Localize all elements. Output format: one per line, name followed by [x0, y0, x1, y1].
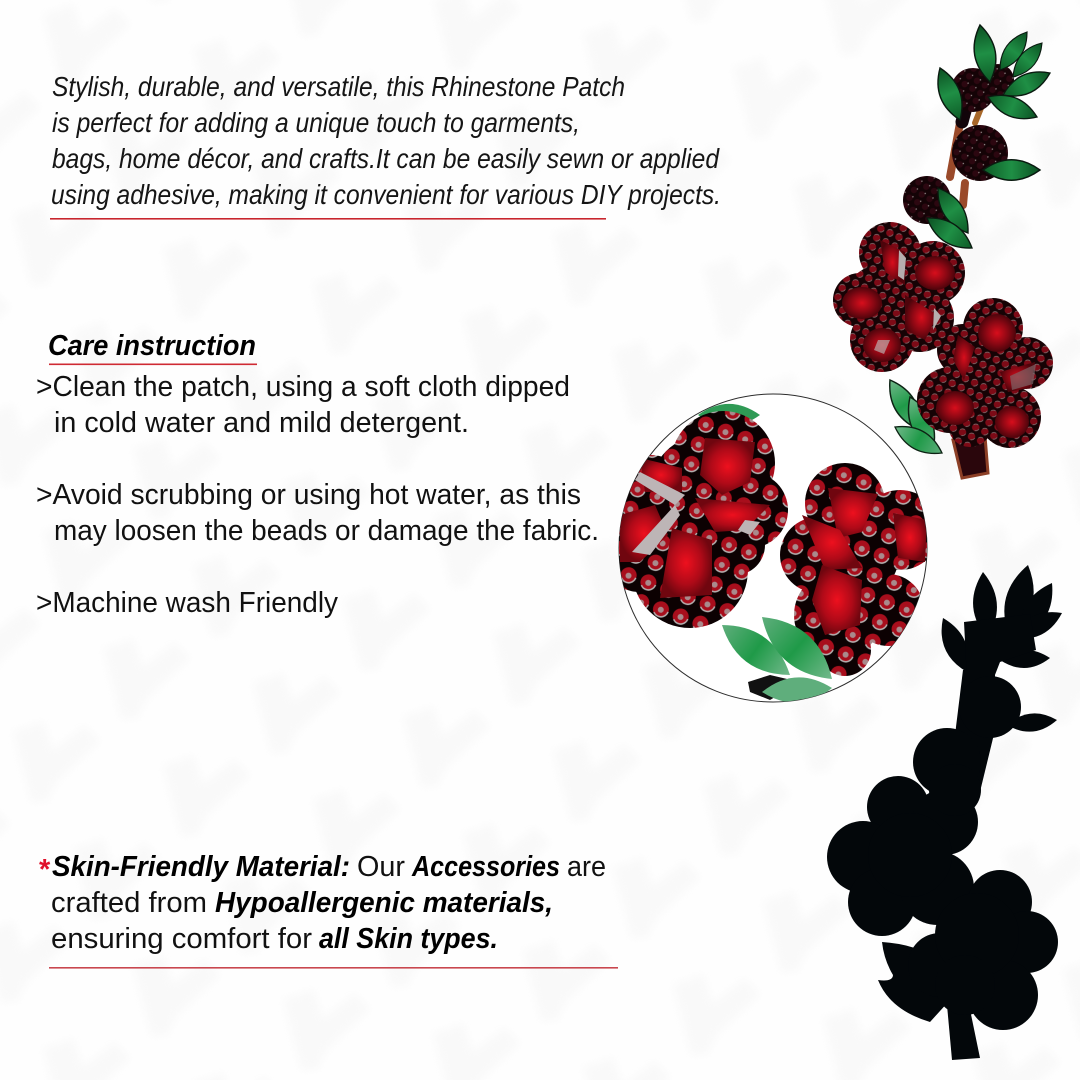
- care instruction list: >Machine wash Friendly: [36, 587, 338, 619]
- left flower in zoom: [619, 411, 788, 628]
- heading: care instruction: Care instruction: [48, 330, 256, 362]
- skin-friendly material note: Accessories: [411, 851, 560, 883]
- right flower in zoom: [780, 463, 940, 676]
- stem beads: [950, 100, 983, 205]
- black backing silhouette of patch: [827, 562, 1066, 1060]
- lower flower gems: [936, 314, 1035, 438]
- intro text block: using adhesive, making it convenient for various DIY projects.: [51, 179, 721, 210]
- upper flower: [833, 222, 965, 372]
- dark berries: [903, 64, 1014, 233]
- intro text block: is perfect for adding a unique touch to garments,: [52, 107, 580, 138]
- lower green leaves: [881, 375, 947, 461]
- care instruction list: in cold water and mild detergent.: [54, 407, 469, 439]
- bottom stem: [953, 436, 988, 478]
- silhouette stems: [955, 670, 995, 800]
- upper flower gems: [842, 240, 955, 362]
- silhouette leaves: [933, 562, 1066, 734]
- care instruction list: >Avoid scrubbing or using hot water, as this: [36, 479, 581, 511]
- skin-friendly material note: all Skin types.: [319, 923, 498, 955]
- skin-friendly material note: ensuring comfort for: [51, 923, 312, 955]
- green leaves: [922, 23, 1054, 256]
- care instruction list: may loosen the beads or damage the fabric.: [54, 515, 599, 547]
- skin-friendly material note: Skin-Friendly Material:: [52, 851, 350, 883]
- lower flower: [917, 298, 1053, 448]
- right flower gems: [802, 488, 927, 635]
- skin-friendly material note: *: [39, 854, 51, 886]
- skin-friendly material note: Hypoallergenic materials,: [215, 887, 553, 919]
- care instruction list: >Clean the patch, using a soft cloth dipped: [36, 371, 570, 403]
- left flower gems: [620, 438, 770, 598]
- intro text block: [51, 71, 721, 210]
- gem highlights: [874, 250, 941, 354]
- rhinestone patch: front view: [833, 23, 1054, 478]
- skin-friendly material note: are: [567, 851, 606, 883]
- skin-friendly material note: [39, 851, 606, 955]
- intro text block: bags, home décor, and crafts.It can be easily sewn or applied: [52, 143, 720, 174]
- left flower grey highlights: [632, 472, 760, 555]
- grey reflection: [1010, 364, 1036, 390]
- skin-friendly material note: crafted from: [51, 887, 207, 919]
- care instruction list: [36, 371, 599, 619]
- skin-friendly material note: Our: [357, 851, 405, 883]
- green leaves in zoom: [722, 617, 832, 702]
- green leaf behind top: [698, 404, 760, 420]
- intro text block: Stylish, durable, and versatile, this Rhinestone Patch: [52, 71, 625, 102]
- zoom circle detail of patch: [618, 394, 928, 702]
- silhouette lobes: [867, 776, 929, 838]
